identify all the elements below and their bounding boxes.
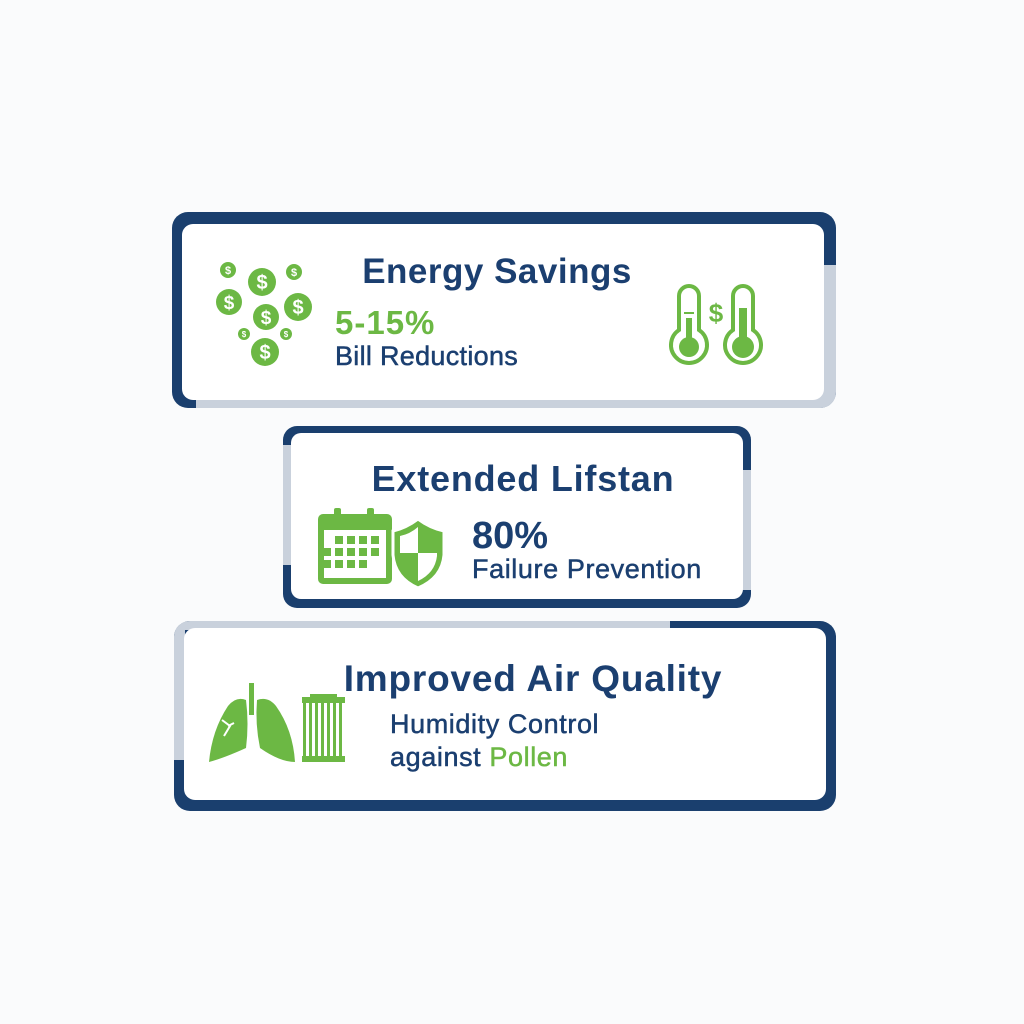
icon: calendar [318,508,392,584]
icon: dollar coins: $ [225,265,231,277]
icon: dollar coins: $ [284,330,289,339]
icon: dollar coins: $ [242,330,247,339]
icon: thermometers [671,286,761,363]
label: bill reductions: Bill Reductions [335,341,518,371]
heading: improved air quality: Improved Air Quality [344,658,722,699]
icon: dollar coins: $ [259,342,271,364]
panel: improved air quality [170,616,836,811]
stat: 80%: 80% [472,515,548,557]
text: humidity control against pollen: Humidity Control [390,709,599,739]
panel: energy savings [172,212,846,416]
icon: dollar coins: $ [256,272,268,294]
icon: thermometers: $ [709,298,724,328]
icon: dollar coins: $ [292,297,304,319]
icon: dollar coins: $ [261,308,272,329]
icon: dollar coins: $ [291,267,297,279]
heading: extended lifstan: Extended Lifstan [372,458,674,499]
icon: lungs [209,683,295,762]
stat: 5-15%: 5-15% [335,304,435,341]
panel: extended lifespan [278,426,756,608]
icon: dollar coins: $ [224,293,235,314]
label: failure prevention: Failure Prevention [472,554,702,584]
icon: air filter [302,694,345,762]
icon: dollar coins [216,262,312,366]
icon: shield [393,519,444,588]
panel: improved air quality: against Pollen [390,742,568,772]
heading: energy savings: Energy Savings [362,252,632,291]
